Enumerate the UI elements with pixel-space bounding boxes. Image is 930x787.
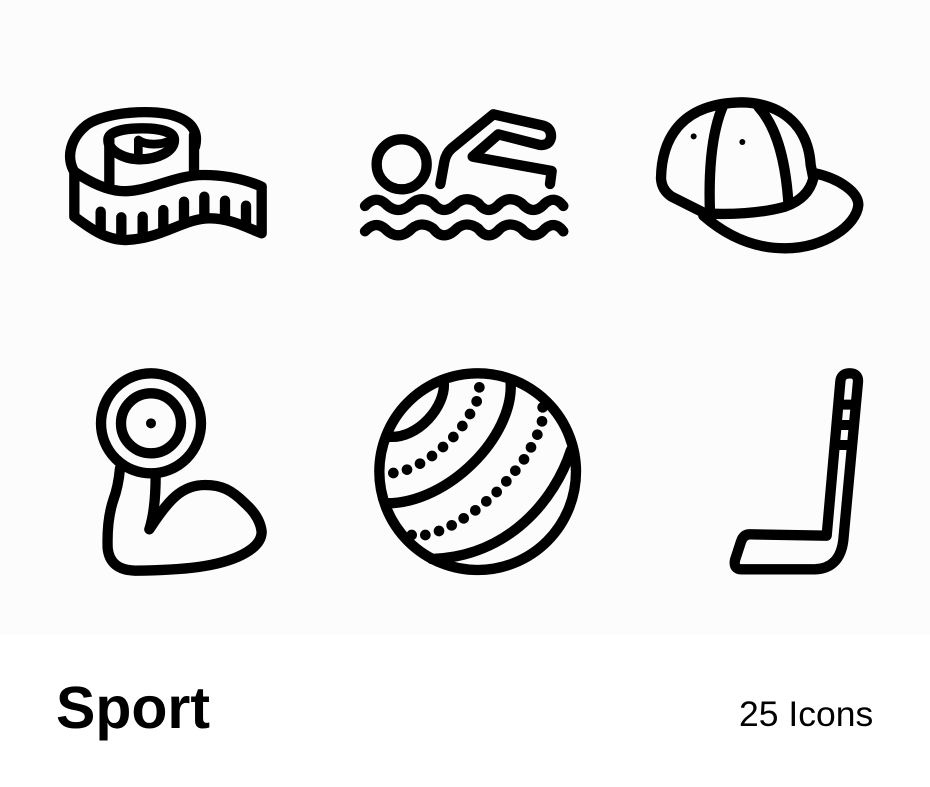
icon: swimmer [365,114,563,235]
title: Sport [56,675,210,741]
icon: exercise ball [379,373,576,570]
upper dotted seam [388,382,485,478]
icon: baseball cap [661,102,858,248]
icon: flexed arm with weight plate [101,373,262,571]
icon: measuring tape [70,112,262,240]
icon: hockey stick [735,373,858,569]
lower dotted seam [406,402,548,540]
icon count label: 25 Icons [739,694,873,734]
